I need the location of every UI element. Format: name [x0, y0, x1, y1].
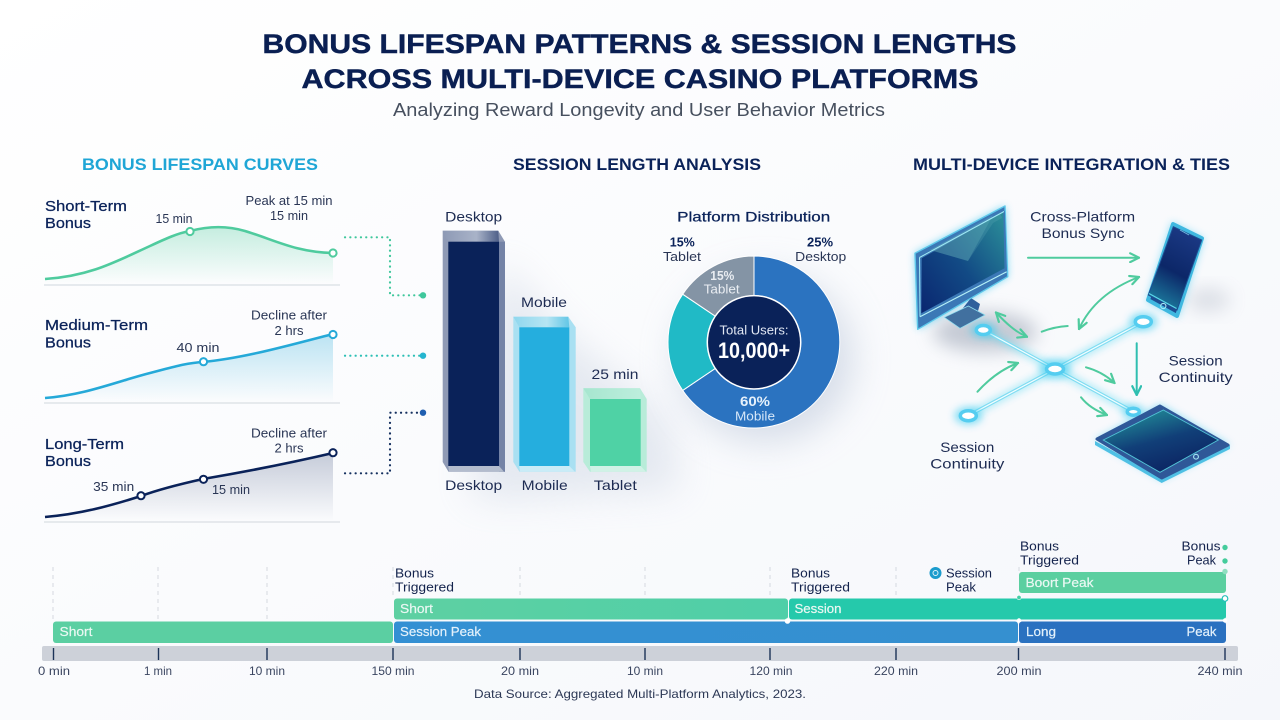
axis labels: 200 min	[996, 664, 1042, 678]
axis labels: 240 min	[1198, 664, 1242, 678]
title: BONUS LIFESPAN PATTERNS & SESSION LENGTHS	[262, 29, 1016, 59]
donut chart: platform distribution: Mobile	[735, 408, 775, 424]
heading: bonus lifespan curves: BONUS LIFESPAN CURVES	[82, 155, 318, 174]
donut chart: platform distribution: Platform Distribution	[677, 208, 830, 224]
bar: tablet: 25 min	[592, 366, 638, 382]
chart: short-term bonus curve	[44, 193, 340, 285]
label: session continuity left: Session	[940, 439, 994, 455]
label: session continuity right	[1159, 352, 1233, 385]
network connections	[968, 322, 1143, 416]
bar: session	[789, 598, 1226, 620]
donut chart: platform distribution	[663, 208, 853, 442]
slice: teal	[668, 294, 715, 390]
chart: medium-term bonus curve: 2 hrs	[274, 323, 304, 338]
bar: desktop: Desktop	[445, 477, 502, 493]
slice: blue	[683, 256, 840, 428]
label: cross-platform bonus sync: Cross-Platform	[1030, 208, 1135, 224]
bar: short lower row	[53, 622, 393, 643]
axis labels: 220 min	[874, 664, 918, 678]
panel: multi-device integration	[913, 155, 1233, 483]
panel: bonus lifespan curves	[44, 155, 340, 522]
timeline axis	[42, 646, 1238, 661]
panel: session length analysis	[443, 155, 853, 500]
bar: desktop: Desktop	[445, 208, 502, 224]
bar: desktop	[443, 208, 505, 493]
label: session peak with icon: Session	[946, 566, 992, 580]
donut chart: platform distribution: Tablet	[704, 282, 740, 296]
label: bonus peak	[1182, 540, 1220, 568]
chart: medium-term bonus curve: Decline after	[251, 308, 328, 322]
axis labels: 1 min	[144, 664, 172, 678]
chart: short-term bonus curve: 15 min	[270, 208, 308, 223]
label: session continuity left	[930, 439, 1004, 472]
chart: short-term bonus curve: Short-Term	[45, 199, 127, 215]
chart: long-term bonus curve: 35 min	[93, 479, 134, 494]
chart: short-term bonus curve: 15 min	[156, 211, 192, 226]
connector: long-term to bars	[345, 410, 426, 473]
label: bonus peak: Bonus	[1182, 540, 1220, 554]
bar: mobile	[513, 294, 576, 493]
bar: long and peak	[1019, 622, 1226, 643]
icon: smartphone	[1146, 222, 1204, 318]
arrow: hub to right	[1086, 367, 1114, 383]
donut chart: platform distribution: 60%	[740, 394, 770, 409]
label: bonus triggered 2	[791, 566, 850, 594]
label: bonus triggered 3	[1020, 540, 1079, 568]
bar: session peak	[394, 622, 1018, 643]
chart: medium-term bonus curve: 40 min	[176, 340, 220, 355]
donut centre	[707, 296, 801, 389]
label: cross-platform bonus sync	[1030, 208, 1135, 241]
chart: long-term bonus curve: 15 min	[212, 482, 250, 497]
bar: short upper row	[394, 598, 788, 620]
axis labels: 20 min	[501, 664, 539, 678]
timeline guide lines	[53, 567, 1019, 620]
axis labels: 10 min	[627, 664, 663, 678]
chart: short-term bonus curve: Peak at 15 min	[246, 193, 332, 208]
label: bonus triggered 1: Triggered	[395, 580, 454, 594]
label: session peak with icon: Peak	[946, 580, 977, 594]
bar: boost peak: Boort Peak	[1026, 575, 1094, 590]
arrow: phone to tablet	[1136, 343, 1138, 395]
slice: gray	[683, 256, 754, 316]
bar: session peak: Session Peak	[400, 624, 482, 639]
bar shadows	[470, 260, 680, 500]
bar: long and peak: Long	[1026, 624, 1056, 639]
icon: tablet	[1095, 404, 1230, 483]
donut chart: platform distribution: 10,000+	[718, 338, 790, 363]
label: session continuity left: Continuity	[930, 456, 1004, 472]
axis labels	[38, 664, 1242, 678]
bar: tablet: Tablet	[594, 477, 637, 493]
heading: session length analysis: SESSION LENGTH ANALYSIS	[513, 155, 761, 174]
donut chart: platform distribution: Total Users:	[720, 322, 788, 338]
title	[262, 29, 1016, 94]
label: cross-platform bonus sync: Bonus Sync	[1042, 225, 1124, 241]
label: bonus triggered 1: Bonus	[395, 566, 434, 580]
chart: medium-term bonus curve: Bonus	[45, 336, 91, 352]
icon: desktop monitor	[915, 206, 1008, 329]
label: session continuity right: Session	[1169, 352, 1223, 368]
connector: short-term to bars	[345, 237, 426, 298]
connector: medium-term to bars	[345, 352, 426, 359]
bar: short upper row: Short	[400, 601, 433, 616]
axis labels: 10 min	[249, 664, 285, 678]
panel: session timeline	[38, 540, 1242, 678]
timeline markers	[785, 545, 1228, 624]
subtitle: Analyzing Reward Longevity and User Behavior Metrics	[393, 99, 885, 120]
network nodes	[954, 313, 1157, 425]
label: bonus triggered 2: Bonus	[791, 566, 830, 580]
chart: long-term bonus curve: Long-Term	[45, 437, 124, 453]
arrow: phone to hub	[1079, 277, 1139, 329]
chart: medium-term bonus curve: Medium-Term	[45, 318, 148, 334]
label: bonus triggered 3: Bonus	[1020, 540, 1059, 554]
label: session peak with icon	[930, 566, 992, 594]
chart: long-term bonus curve: Bonus	[45, 454, 91, 470]
donut chart: platform distribution: Desktop	[795, 249, 846, 264]
bar: mobile: Mobile	[521, 294, 567, 310]
bar: boost peak	[1019, 572, 1226, 593]
label: bonus peak: Peak	[1187, 554, 1217, 568]
device shadows	[933, 288, 1230, 352]
heading: multi-device integration and ties: MULTI-DEVICE INTEGRATION & TIES	[913, 155, 1230, 174]
chart: long-term bonus curve	[44, 426, 340, 522]
bar chart: session length by device	[443, 208, 647, 493]
donut chart: platform distribution: 15%	[670, 234, 695, 250]
bar: long and peak: Peak	[1186, 624, 1217, 639]
donut chart: platform distribution: 15%	[710, 268, 735, 283]
arrow: cross-platform sync	[1028, 257, 1139, 259]
bar: short lower row: Short	[60, 624, 93, 639]
donut chart: platform distribution: 25%	[807, 234, 833, 250]
label: bonus triggered 2: Triggered	[791, 580, 850, 594]
axis labels: 120 min	[750, 664, 792, 678]
donut chart: platform distribution: Tablet	[663, 249, 701, 264]
arrow: hub to tablet	[1081, 397, 1107, 415]
chart: short-term bonus curve: Bonus	[45, 216, 91, 232]
arrow: monitor to hub	[996, 312, 1027, 337]
label: bonus triggered 1	[395, 566, 454, 594]
bar: session: Session	[794, 601, 842, 616]
chart: long-term bonus curve: Decline after	[251, 426, 328, 440]
label: bonus triggered 3: Triggered	[1020, 554, 1079, 568]
bar: tablet	[583, 366, 647, 493]
arrow: lower left to hub	[978, 363, 1018, 392]
label: session continuity right: Continuity	[1159, 369, 1233, 385]
axis labels: 0 min	[38, 664, 70, 678]
chart: long-term bonus curve: 2 hrs	[274, 440, 304, 456]
arrow: short dash	[1042, 326, 1068, 332]
chart: medium-term bonus curve	[44, 308, 340, 403]
bar: mobile: Mobile	[522, 477, 568, 493]
title: ACROSS MULTI-DEVICE CASINO PLATFORMS	[302, 64, 978, 94]
data source note: Data Source: Aggregated Multi-Platform Analytics, 2023.	[474, 687, 806, 701]
axis labels: 150 min	[372, 664, 414, 678]
